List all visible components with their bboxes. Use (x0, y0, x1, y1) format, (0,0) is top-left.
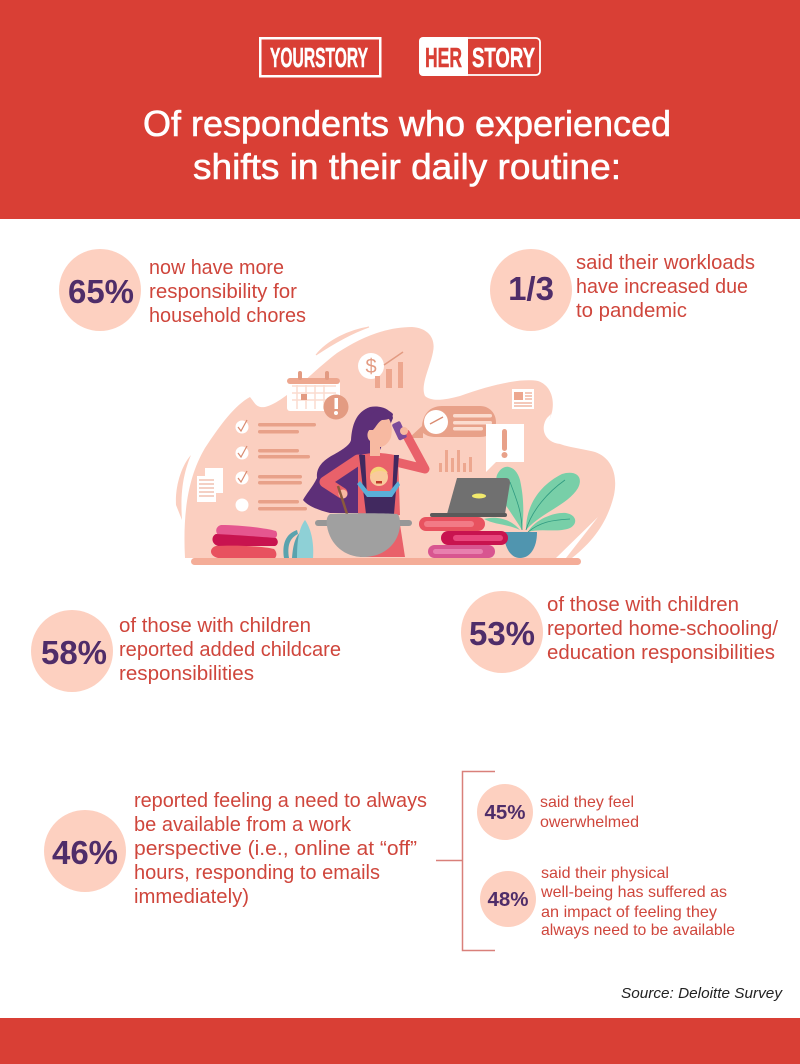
logo: HerStory: HER (425, 42, 462, 73)
stat: 53% home-schooling (461, 591, 778, 673)
stat: 58% childcare: 58% (41, 634, 107, 671)
stat: 65% household chores: household chores (149, 305, 306, 327)
stat: 65% household chores: responsibility for (149, 281, 297, 303)
torso (358, 453, 400, 515)
stat: 53% home-schooling: of those with children (547, 594, 739, 616)
stat: 46% always available: reported feeling a need to always (134, 790, 427, 812)
icon: newspaper (512, 389, 534, 409)
arm holding spoon (325, 460, 358, 493)
background blob (184, 327, 615, 558)
plant (484, 467, 580, 558)
stat: 58% childcare: reported added childcare (119, 639, 341, 661)
stat: 58% childcare: responsibilities (119, 663, 254, 685)
laptop (430, 478, 510, 517)
stat: 46% always available: immediately) (134, 886, 249, 908)
icon: dollar with growth chart: $ (365, 356, 377, 378)
speech bubble with clock (409, 406, 496, 438)
stat: 48% physical well-being: an impact of feeling they (541, 904, 717, 921)
iron (283, 520, 313, 558)
stat: 1/3 workloads (490, 249, 755, 331)
cooking pot (315, 513, 412, 557)
title (143, 103, 671, 187)
stat: 46% always available: 46% (52, 834, 118, 871)
stat: 45% overwhelmed: 45% (484, 801, 526, 824)
phone (392, 421, 407, 441)
title: shifts in their daily routine: (193, 146, 621, 187)
stack of books (419, 517, 508, 558)
stat: 1/3 workloads: to pandemic (576, 300, 687, 322)
stat: 46% always available (44, 790, 427, 908)
stat: 48% physical well-being: 48% (487, 888, 529, 911)
logo: HerStory (419, 37, 540, 76)
stat: 65% household chores (59, 249, 306, 331)
source note: Source: Deloitte Survey (621, 986, 783, 1002)
stat: 46% always available: hours, responding to emails (134, 862, 380, 884)
folded clothes (211, 525, 278, 558)
logo: YourStory: YOURSTORY (270, 42, 368, 73)
footer band (0, 1018, 800, 1064)
icon: documents (197, 468, 223, 502)
long hair (303, 407, 393, 513)
stat: 45% overwhelmed: owerwhelmed (540, 814, 639, 831)
stat: 53% home-schooling: reported home-schooling/ (547, 618, 778, 640)
decorative swooshes (176, 455, 191, 520)
icon: dollar with growth chart (358, 352, 403, 388)
icon: calendar with alert (287, 371, 348, 420)
floor line (191, 558, 581, 565)
spoon (338, 486, 347, 514)
stat: 48% physical well-being: always need to be available (541, 922, 735, 939)
stat: 65% household chores: 65% (68, 273, 134, 310)
stat: 58% childcare: of those with children (119, 615, 311, 637)
logo: YourStory (260, 38, 380, 76)
header band (0, 0, 800, 219)
stat: 48% physical well-being (480, 865, 735, 939)
stat: 46% always available: perspective (i.e., online at “off” (134, 838, 417, 860)
phone arm (392, 434, 425, 469)
mini bar chart (439, 450, 472, 472)
skirt (358, 505, 405, 557)
stat: 1/3 workloads: said their workloads (576, 252, 755, 274)
mother with baby (303, 407, 425, 557)
bracket connector (436, 772, 495, 950)
stat: 53% home-schooling: 53% (469, 615, 535, 652)
neck and face (367, 415, 392, 456)
logo: HerStory: STORY (472, 42, 535, 73)
alert speech box (486, 424, 524, 472)
stat: 1/3 workloads: have increased due (576, 276, 748, 298)
stat: 46% always available: be available from a work (134, 814, 352, 836)
stat: 53% home-schooling: education responsibilities (547, 642, 775, 664)
baby (357, 481, 400, 497)
stat: 45% overwhelmed: said they feel (540, 794, 634, 811)
stat: 65% household chores: now have more (149, 257, 284, 279)
title: Of respondents who experienced (143, 103, 671, 144)
stat: 1/3 workloads: 1/3 (508, 270, 554, 307)
illustration: multitasking mother (176, 327, 615, 565)
baby carrier straps (359, 455, 399, 514)
hair fringe (368, 409, 393, 430)
stat: 48% physical well-being: said their physical (541, 865, 669, 882)
stat: 58% childcare (31, 610, 341, 692)
icon: checklist (236, 420, 316, 512)
stat: 45% overwhelmed (477, 784, 639, 840)
stat: 48% physical well-being: well-being has suffered as (540, 884, 727, 901)
